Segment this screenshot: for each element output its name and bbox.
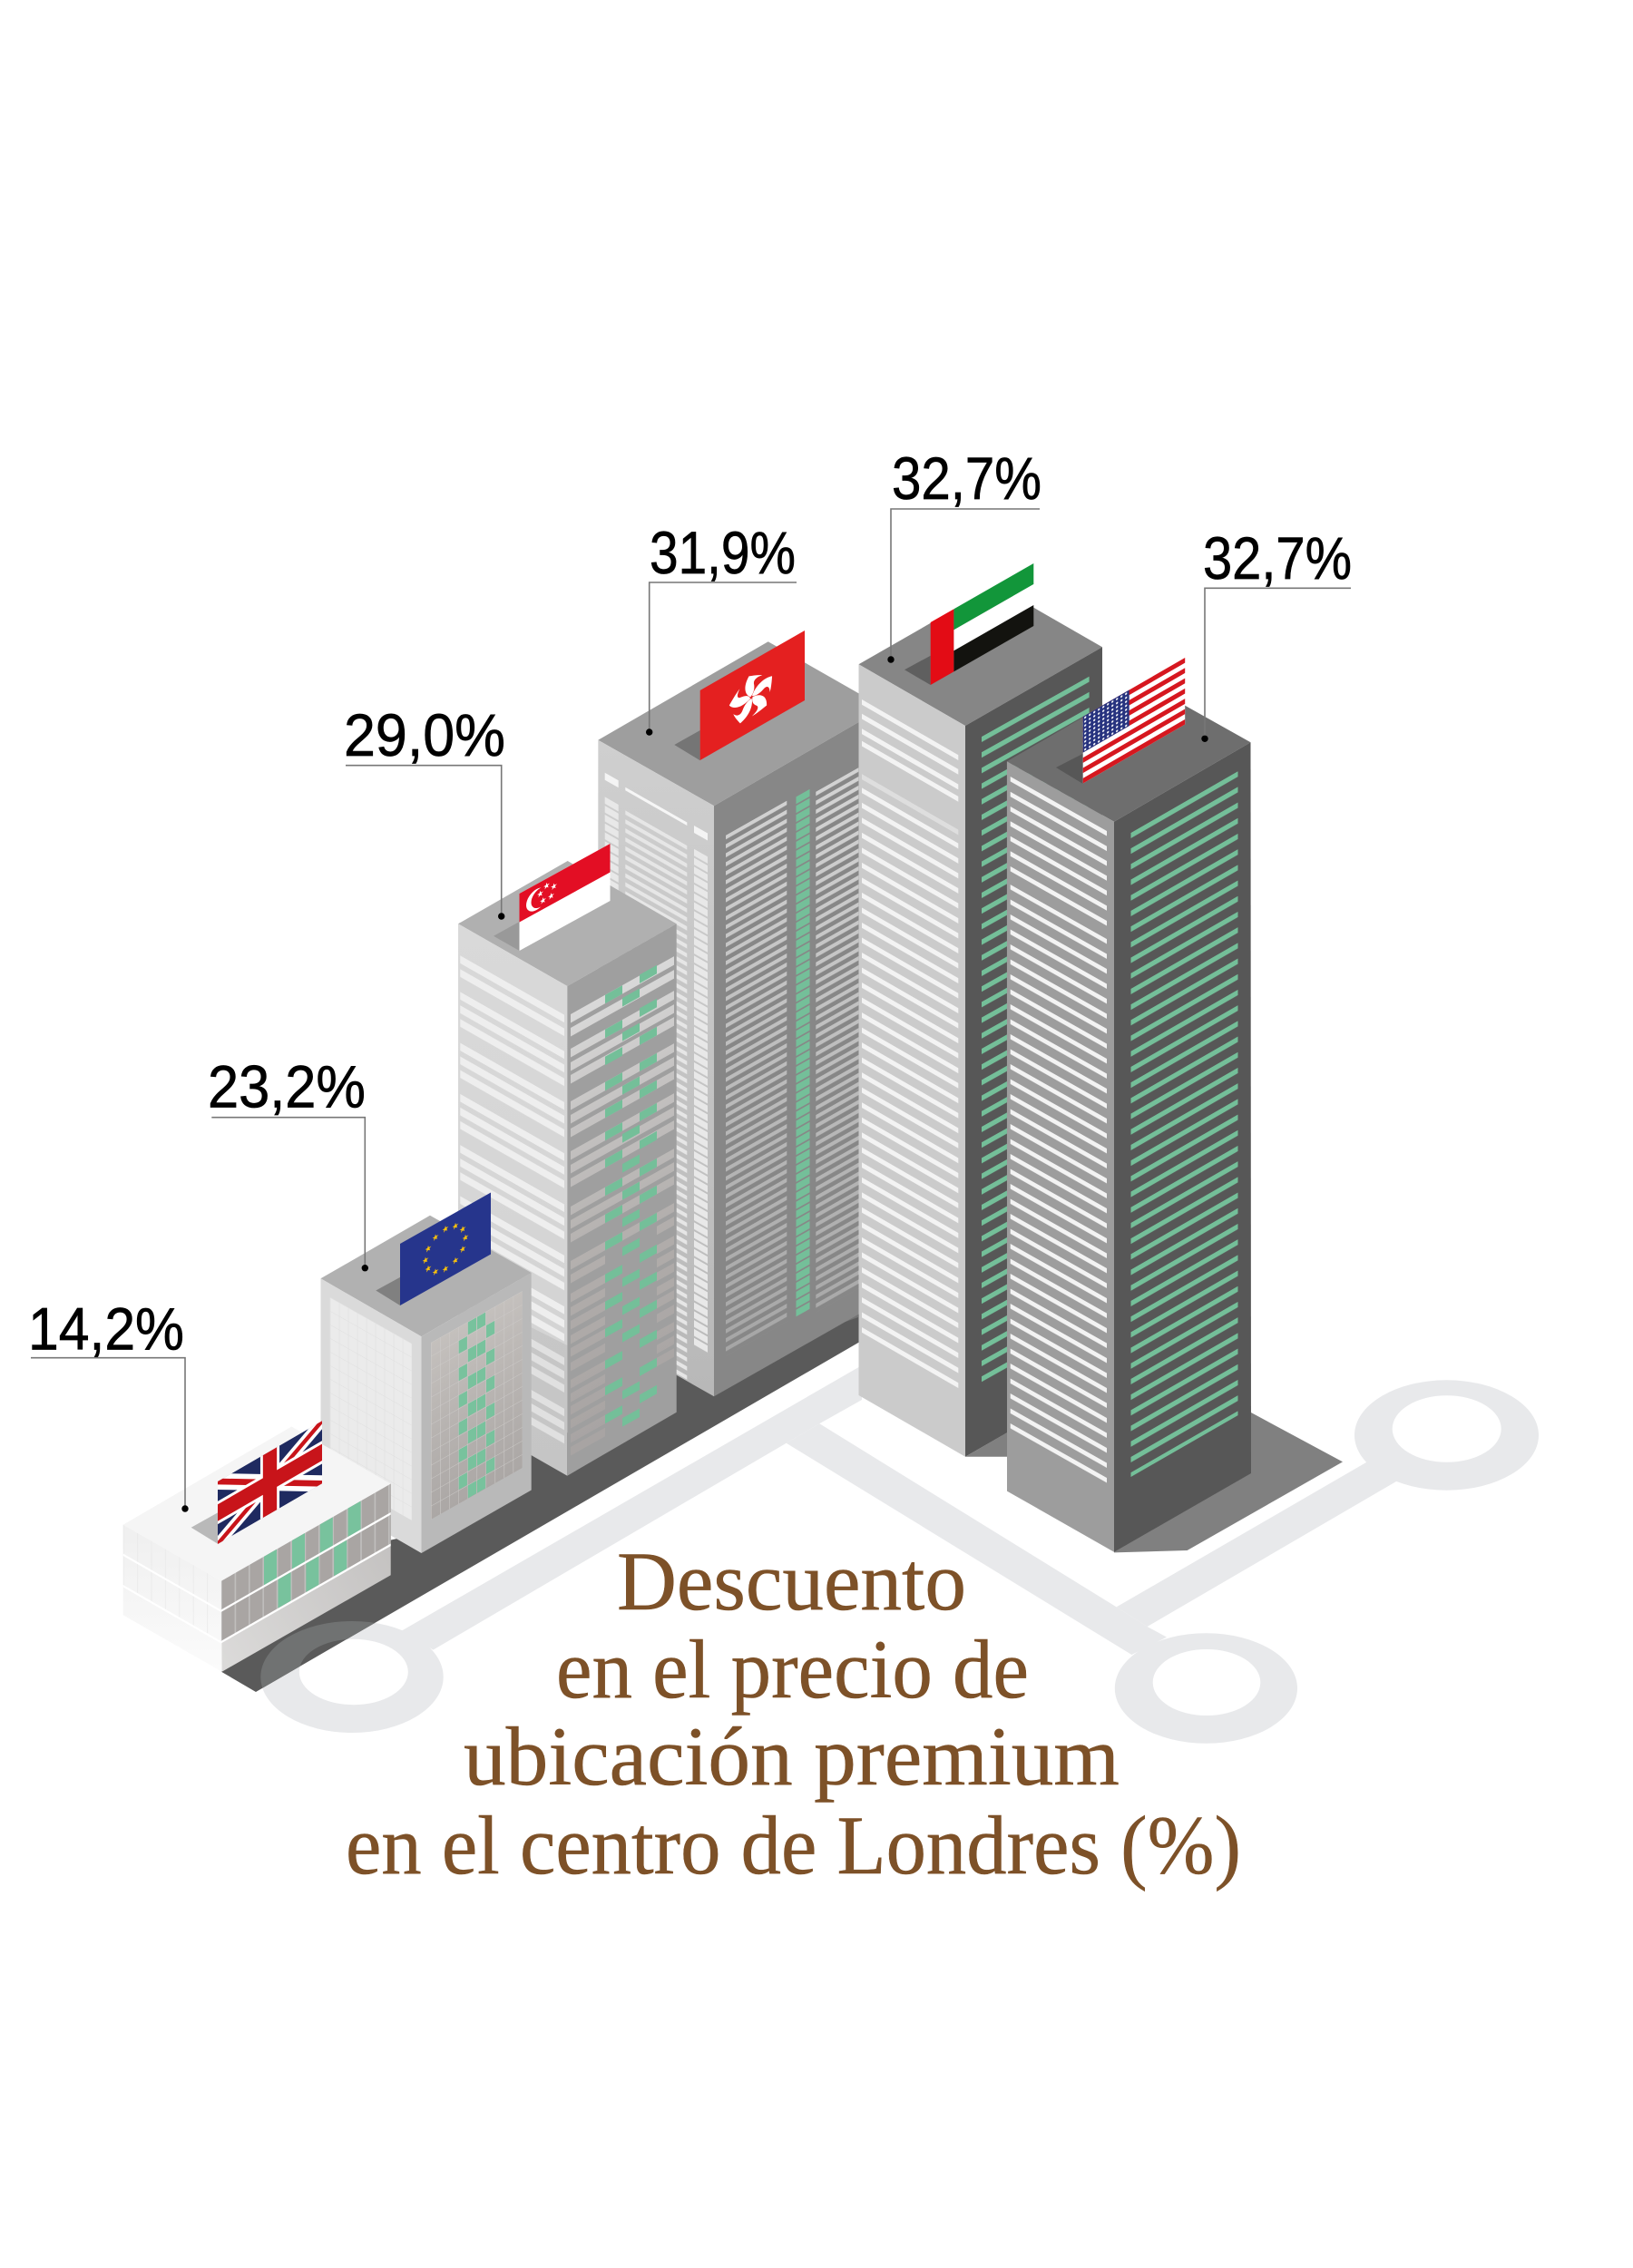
ring seen through the dark strip — [260, 1621, 375, 1688]
left face — [123, 1525, 222, 1672]
flag slot — [494, 922, 519, 951]
flag: Singapore — [519, 844, 610, 951]
label: UAE 32,7% — [887, 445, 1041, 663]
label: UAE 32,7%: 32,7% — [892, 445, 1041, 512]
left face — [321, 1278, 421, 1553]
title: en el precio de — [556, 1623, 1029, 1716]
ground shadow — [965, 1432, 1009, 1457]
flag: Hong Kong — [700, 631, 805, 760]
roof — [321, 1216, 532, 1336]
right window panel — [431, 1291, 523, 1520]
right face green stripes — [1130, 771, 1237, 1477]
left face — [458, 924, 567, 1476]
ground shadow — [1114, 1413, 1343, 1552]
label: Singapore 29,0%: 29,0% — [344, 701, 505, 768]
right face window rows — [571, 955, 674, 1455]
left face stripes — [862, 699, 958, 1389]
label: UK 14,2%: 14,2% — [28, 1295, 184, 1363]
label: Hong Kong 31,9%: 31,9% — [650, 519, 796, 586]
left face — [598, 740, 714, 1396]
flag slot — [674, 730, 700, 760]
dark base strip under the buildings — [221, 1297, 862, 1692]
flag: European Union — [400, 1192, 491, 1305]
green windows — [264, 1501, 361, 1617]
left face — [858, 664, 965, 1457]
label: UK 14,2% — [28, 1295, 189, 1512]
flag slot — [1056, 754, 1083, 784]
building: Singapore — [458, 844, 677, 1476]
left window panel — [330, 1297, 412, 1520]
building: United Kingdom — [123, 1421, 391, 1672]
right face — [567, 924, 677, 1476]
building: United States — [1007, 658, 1343, 1552]
left face windows — [605, 773, 619, 1385]
right face green stripes — [982, 677, 1090, 1383]
right face — [965, 647, 1102, 1457]
roof — [858, 586, 1102, 726]
building: Hong Kong — [598, 631, 884, 1396]
flag slot — [191, 1512, 218, 1544]
right face — [714, 708, 884, 1396]
flag slot — [905, 656, 931, 685]
roof — [123, 1426, 391, 1581]
roof — [1007, 682, 1250, 822]
left face stripes — [460, 955, 564, 1458]
roof — [458, 861, 677, 986]
left face stripes — [1011, 777, 1107, 1483]
ground road network with ring nodes — [260, 1365, 1539, 1744]
label: USA 32,7%: 32,7% — [1203, 524, 1352, 591]
right face — [221, 1484, 391, 1672]
title: ubicación premium — [464, 1710, 1120, 1803]
flag: United States — [1083, 658, 1185, 784]
label: Singapore 29,0% — [344, 701, 505, 920]
green windows — [605, 965, 657, 1436]
title — [346, 1535, 1241, 1892]
label: EU 23,2%: 23,2% — [208, 1053, 366, 1120]
label: EU 23,2% — [208, 1053, 368, 1271]
building: United Arab Emirates — [858, 563, 1102, 1457]
label: USA 32,7% — [1201, 524, 1352, 742]
title: en el centro de Londres (%) — [346, 1799, 1241, 1892]
title: Descuento — [617, 1535, 966, 1628]
green windows — [459, 1307, 494, 1503]
right face stripes — [726, 801, 787, 1356]
flag: United Kingdom — [218, 1421, 322, 1544]
roof — [598, 641, 884, 806]
green window column — [797, 789, 809, 1316]
flag: United Arab Emirates — [931, 563, 1033, 685]
right face — [421, 1273, 532, 1553]
left face — [1007, 761, 1114, 1552]
right face — [1114, 742, 1251, 1552]
flag slot — [376, 1277, 400, 1305]
label: Hong Kong 31,9% — [646, 519, 797, 736]
building: European Union — [321, 1192, 532, 1553]
